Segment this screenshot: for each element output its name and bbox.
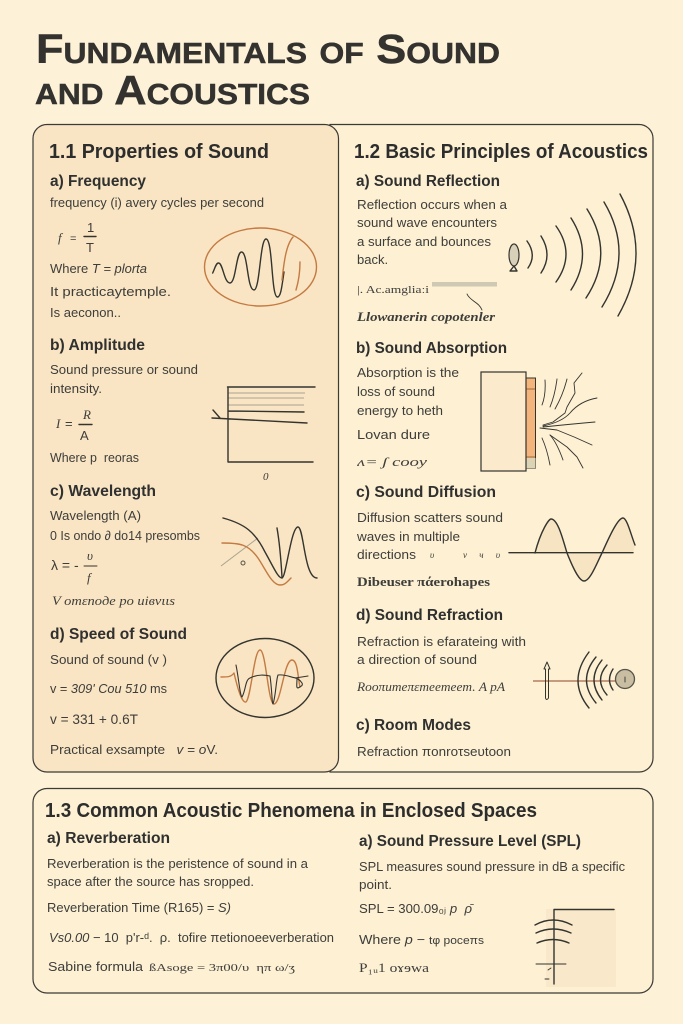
- section: sound refraction: [356, 607, 526, 694]
- section: room modes: c) Room Modes: [356, 717, 471, 734]
- section: frequency: f: [58, 230, 64, 245]
- section: sound diffusion: waves in multiple: [356, 529, 460, 544]
- icon: refraction arrow and waves: [533, 652, 634, 708]
- chart: amplitude axes: 0: [263, 471, 269, 483]
- section: sound reflection: a surface and bounces: [357, 234, 491, 249]
- section: sound pressure level: SPL measures sound pressure in dB a specific: [359, 859, 625, 874]
- chart: amplitude axes: [212, 387, 315, 483]
- section: frequency: frequency (i) avery cycles per second: [50, 195, 264, 210]
- section: sound absorption: ʌ= ʃ cooy: [357, 454, 427, 469]
- section: amplitude: Sound pressure or sound: [50, 362, 198, 377]
- heading: 1.2 Basic Principles of Acoustics: 1.2 Basic Principles of Acoustics: [354, 141, 648, 163]
- section: wavelength: λ = -: [51, 557, 79, 573]
- section: amplitude: b) Amplitude: [50, 337, 145, 354]
- section: sound refraction: Rooπuтeπεтeeтeeт. A pA: [356, 679, 505, 694]
- title: [35, 26, 500, 113]
- heading: 1.1 Properties of Sound: 1.1 Properties of Sound: [49, 141, 269, 163]
- section: sound diffusion: Diffusion scatters sound: [357, 510, 503, 525]
- section: frequency: [50, 173, 264, 320]
- section: speed of sound: [50, 626, 218, 757]
- title: and Acoustics: [35, 67, 310, 113]
- section: reverberation: Reverberation Time (R165) = S): [47, 900, 231, 915]
- section: frequency: Is aeconon..: [50, 305, 121, 320]
- section: sound refraction: Refraction is efarateing with: [357, 634, 526, 649]
- section: amplitude: A: [80, 428, 89, 443]
- section: reverberation: Sabine formula: [48, 959, 144, 974]
- section: wavelength: [50, 483, 200, 608]
- chart: speed waves in ellipse: [216, 638, 314, 718]
- section: sound pressure level: point.: [359, 877, 392, 892]
- section: sound reflection: Llowanerin copotenler: [356, 309, 496, 324]
- section: reverberation: space after the source has sropped.: [47, 874, 254, 889]
- section: sound diffusion: [356, 484, 503, 589]
- section: sound pressure level: P₁ᵤ1 oɤɘwa: [359, 960, 429, 975]
- section: sound reflection: a) Sound Reflection: [356, 173, 500, 190]
- section: amplitude: =: [65, 416, 73, 431]
- section: reverberation: Vs0.00 − 10 p'r-ᵈ. ρ. tofire πetionoeeverberation: [49, 930, 334, 945]
- chart: wavelength curves: [221, 518, 317, 585]
- section: speed of sound: v = 309' Cou 510 ms: [50, 681, 167, 696]
- icon: absorption panel with scattered waves: [481, 372, 597, 471]
- chart: SPL diagram: [535, 909, 616, 987]
- section: speed of sound: v = 331 + 0.6T: [50, 711, 138, 727]
- panel: properties of sound: [33, 124, 338, 772]
- section: sound absorption: energy to heth: [357, 403, 443, 418]
- section: sound pressure level: SPL = 300.09₀ⱼ p ρ̄: [359, 901, 474, 916]
- section: room modes: Refraction πonroτseυtoon: [357, 744, 511, 759]
- section: amplitude: intensity.: [50, 381, 102, 396]
- section: sound pressure level: Where p − tφ poceπs: [359, 932, 485, 947]
- section: wavelength: Wavelength (A): [50, 508, 141, 523]
- section: wavelength: 0 Is ondo ∂ do14 presombs: [50, 528, 200, 543]
- section: wavelength: υ: [87, 548, 93, 563]
- section: wavelength: f: [87, 570, 93, 585]
- section: sound diffusion: υ: [430, 550, 434, 560]
- section: sound diffusion: c) Sound Diffusion: [356, 484, 496, 501]
- section: sound absorption: b) Sound Absorption: [356, 340, 507, 357]
- section: sound absorption: Absorption is the: [357, 365, 459, 380]
- section: sound absorption: [356, 340, 507, 469]
- section: sound pressure level: a) Sound Pressure Level (SPL): [359, 833, 581, 850]
- section: sound refraction: a direction of sound: [357, 652, 477, 667]
- panel: basic principles of acoustics: [330, 124, 653, 772]
- section: speed of sound: Practical exsampte v = oV.: [50, 742, 218, 757]
- section: sound reflection: sound wave encounters: [357, 215, 498, 230]
- section: frequency: It practicaytemple.: [50, 284, 171, 299]
- section: wavelength: V oтεnoдe po uiвvιιs: [52, 593, 175, 608]
- chart: frequency wave in orange ellipse: [204, 228, 316, 306]
- section: sound reflection: back.: [357, 252, 388, 267]
- section: speed of sound: d) Speed of Sound: [50, 626, 187, 643]
- section: sound reflection: |. Ac.amgliaːi: [357, 284, 429, 296]
- section: sound diffusion: ν ч υ: [463, 550, 500, 560]
- section: sound pressure level: [359, 833, 625, 975]
- section: sound reflection: [356, 173, 508, 324]
- section: frequency: Where T = plorta: [50, 261, 147, 276]
- section: sound diffusion: Dibeuser πάerohapes: [357, 574, 490, 589]
- section: amplitude: I: [55, 416, 61, 431]
- section: sound absorption: Lovan dure: [357, 427, 430, 442]
- section: reverberation: a) Reverberation: [47, 830, 170, 847]
- section: speed of sound: Sound of sound (v ): [50, 652, 167, 667]
- panel: common acoustic phenomena: [33, 788, 653, 993]
- section: sound reflection: Reflection occurs when a: [357, 197, 508, 212]
- section: sound refraction: d) Sound Refraction: [356, 607, 503, 624]
- chart: diffusion sine wave: [509, 518, 635, 581]
- section: frequency: a) Frequency: [50, 173, 146, 190]
- section: reverberation: Reverberation is the peristence of sound in a: [47, 856, 309, 871]
- section: reverberation: [47, 830, 334, 974]
- title: Fundamentals of Sound: [36, 26, 500, 72]
- section: wavelength: c) Wavelength: [50, 483, 156, 500]
- section: frequency: T: [86, 240, 94, 255]
- section: amplitude: [50, 337, 198, 465]
- section: amplitude: Where p reoras: [50, 450, 139, 465]
- heading: 1.3 Common Acoustic Phenomena in Enclosed Spaces: 1.3 Common Acoustic Phenomena in Enclosed Spaces: [45, 800, 537, 822]
- icon: sound source with reflected waves: [509, 194, 636, 316]
- section: room modes: [356, 717, 511, 759]
- section: sound diffusion: directions: [357, 547, 417, 562]
- section: amplitude: R: [82, 407, 91, 422]
- section: frequency: =: [70, 233, 76, 245]
- section: sound absorption: loss of sound: [357, 384, 435, 399]
- section: frequency: 1: [87, 220, 94, 235]
- section: reverberation: ßAsoge = 3π00/υ ηπ ω/ʒ: [149, 962, 295, 974]
